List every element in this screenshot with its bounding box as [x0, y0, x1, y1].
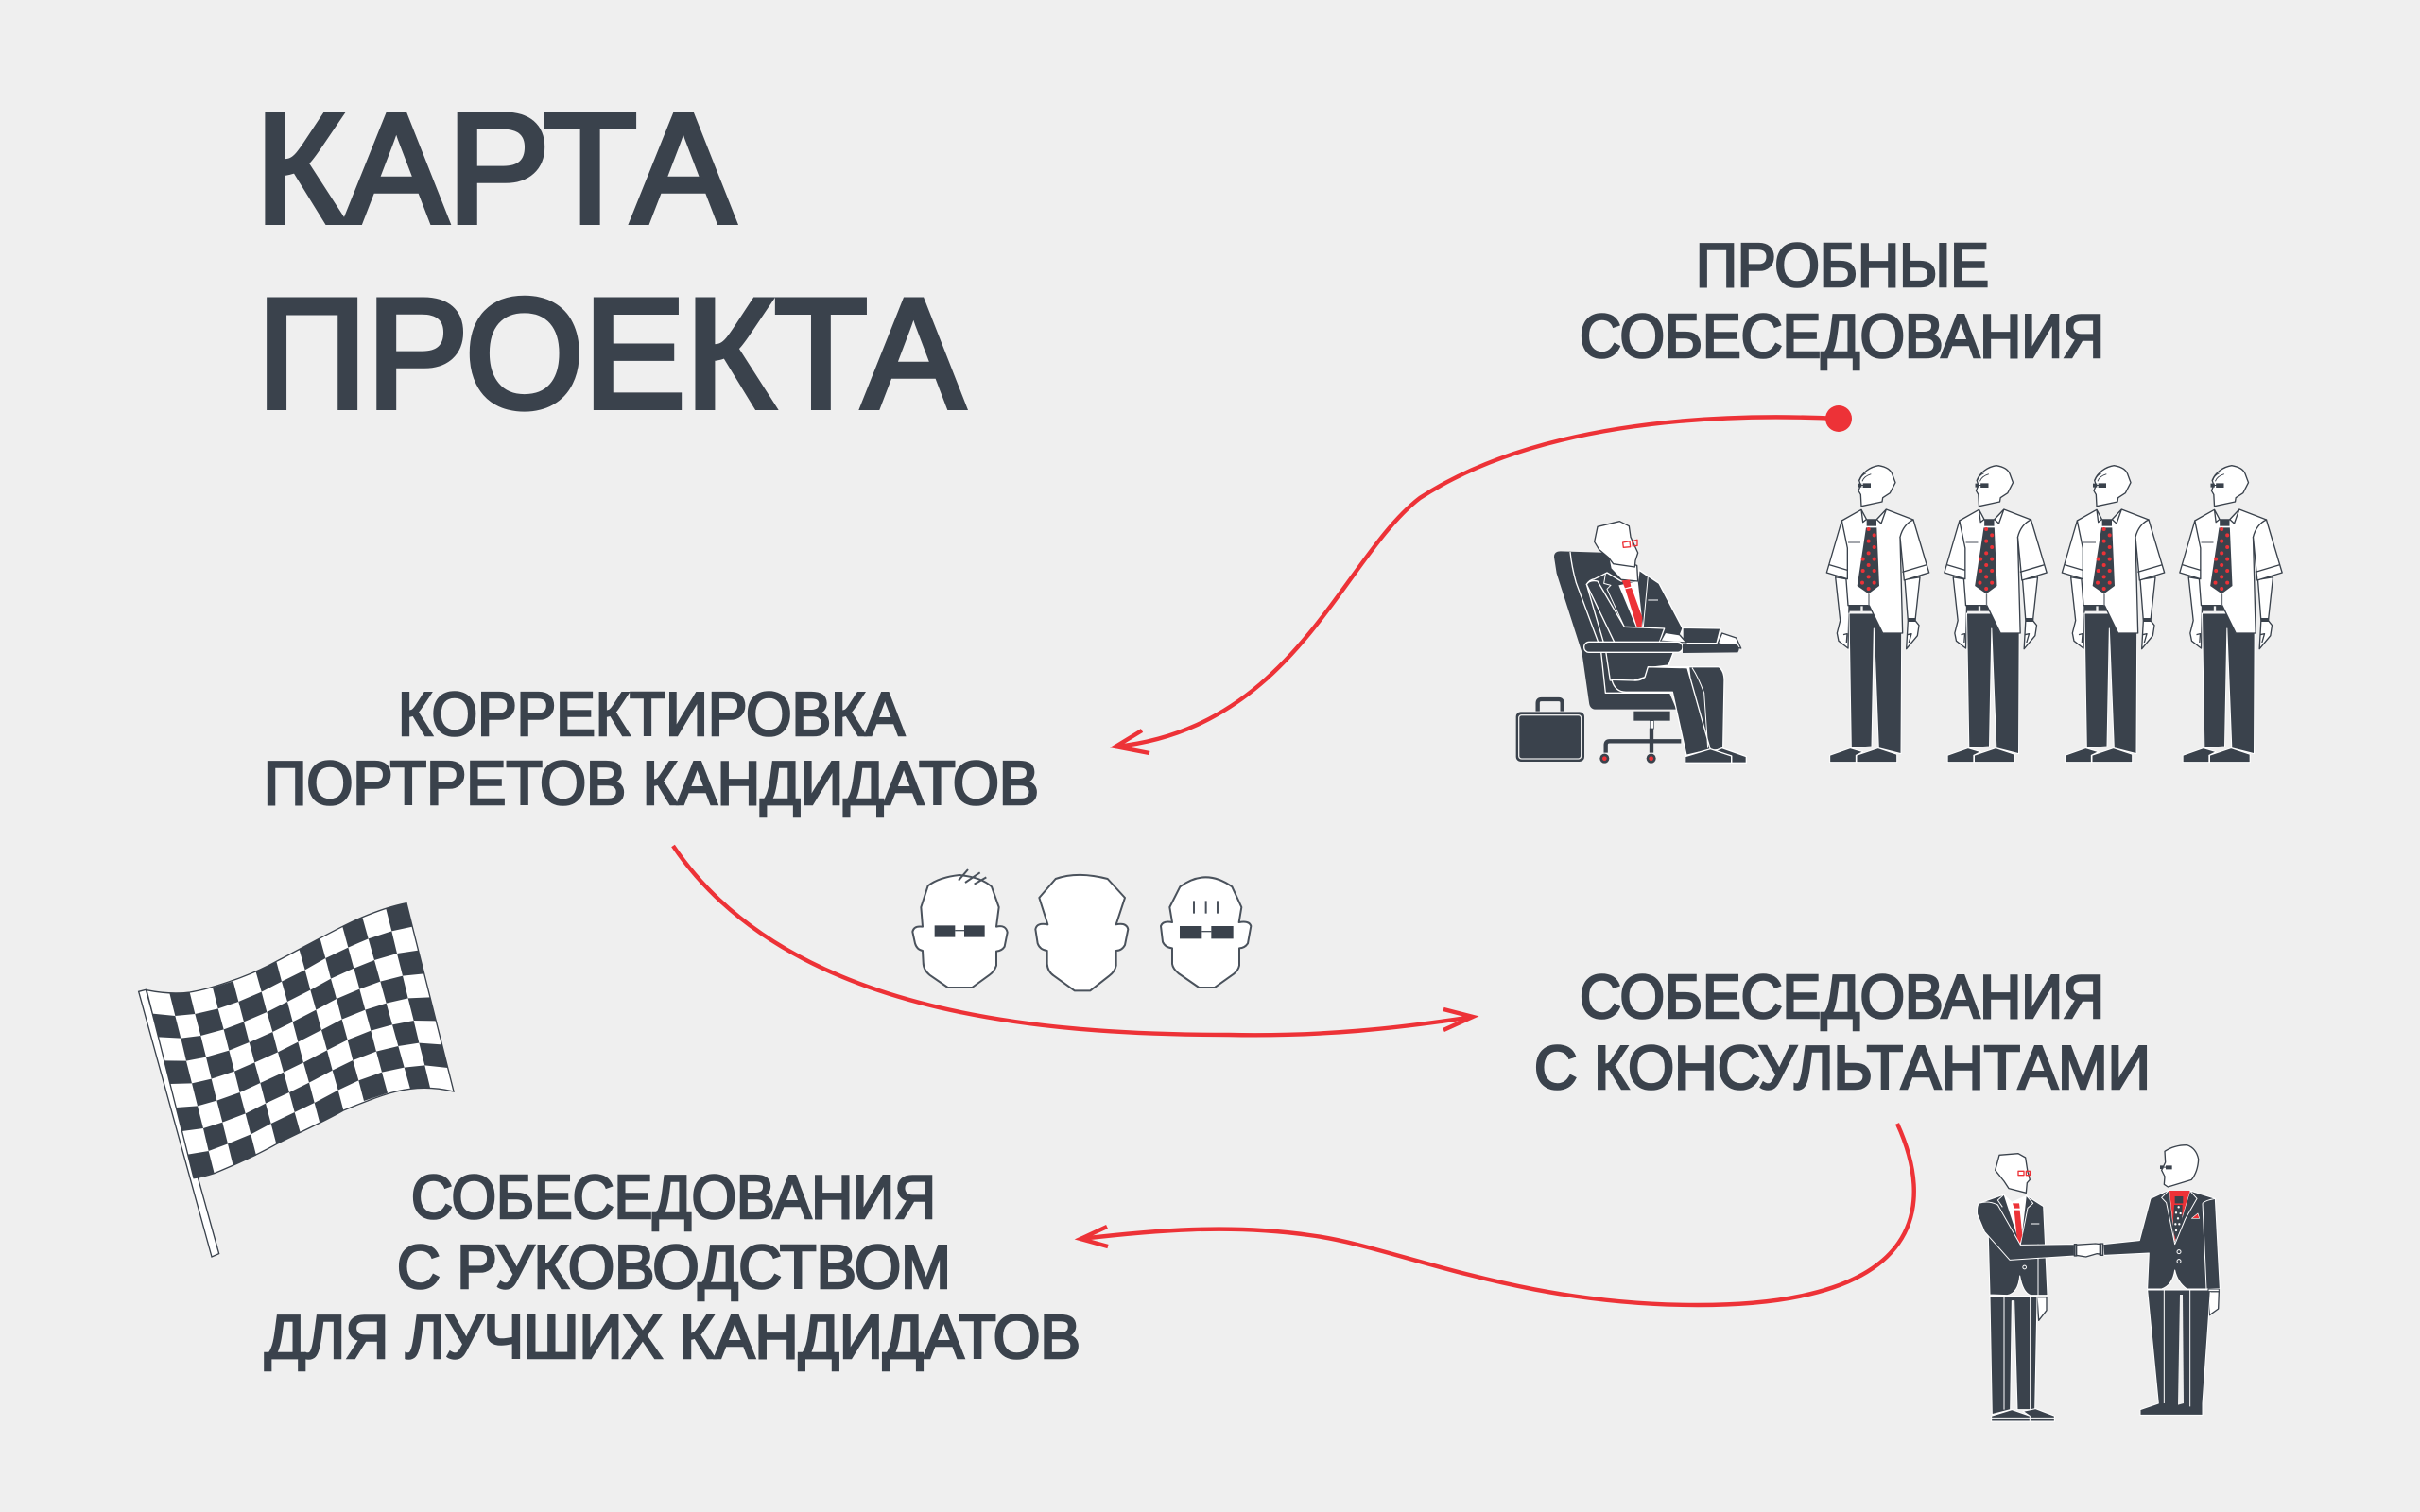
figure: two men shaking hands	[1978, 1145, 2220, 1421]
title: ПРОЕКТА	[257, 266, 964, 440]
heading: trial interviews	[1580, 231, 2104, 370]
figure: standing candidate 2	[1945, 466, 2047, 763]
heading: management interviews: С РУКОВОДСТВОМ	[397, 1232, 951, 1301]
figure: standing candidate 1	[1826, 466, 1929, 763]
heading: trial interviews: ПРОБНЫЕ	[1696, 231, 1989, 300]
heading: candidate portrait adjustment: КОРРЕКТИРОВКА	[398, 679, 906, 748]
flag pole	[139, 989, 219, 1257]
figure: seated man in chair with briefcase	[1516, 522, 1746, 764]
heading: management interviews: СОБЕСЕДОВАНИЯ	[411, 1162, 936, 1231]
heading: management interviews: ДЛЯ ЛУЧШИХ КАНДИДАТОВ	[265, 1302, 1080, 1371]
heading: candidate portrait adjustment	[264, 679, 1039, 817]
arrow: trial interviews to portraits	[1115, 405, 1852, 753]
figure: standing candidate 3	[2062, 466, 2165, 763]
head 1	[912, 869, 1008, 988]
icon: checkered finish flag	[139, 903, 454, 1257]
head 2	[1035, 875, 1128, 990]
man	[1584, 522, 1746, 763]
title	[255, 81, 964, 440]
arrow: portraits to consultants	[673, 846, 1473, 1035]
heading: consultant interviews: СОБЕСЕДОВАНИЯ	[1580, 962, 2104, 1031]
chair	[1554, 551, 1681, 764]
head 3	[1161, 877, 1251, 988]
checker squares	[152, 903, 448, 1178]
heading: candidate portrait adjustment: ПОРТРЕТОВ КАНДИДАТОВ	[264, 748, 1039, 817]
left man	[1978, 1154, 2074, 1421]
title: КАРТА	[255, 81, 735, 255]
figure: standing candidate 4	[2180, 466, 2282, 763]
heading: consultant interviews: С КОНСУЛЬТАНТАМИ	[1534, 1033, 2151, 1102]
briefcase	[1516, 699, 1584, 762]
heading: consultant interviews	[1534, 962, 2151, 1102]
heading: trial interviews: СОБЕСЕДОВАНИЯ	[1580, 301, 2104, 370]
handshake hands	[2074, 1244, 2103, 1257]
right man	[2103, 1145, 2220, 1415]
icon: three candidate heads	[912, 869, 1251, 990]
arrow: consultants to management	[1080, 1124, 1914, 1305]
flag cloth	[147, 903, 454, 1178]
heading: management interviews	[265, 1162, 1080, 1371]
